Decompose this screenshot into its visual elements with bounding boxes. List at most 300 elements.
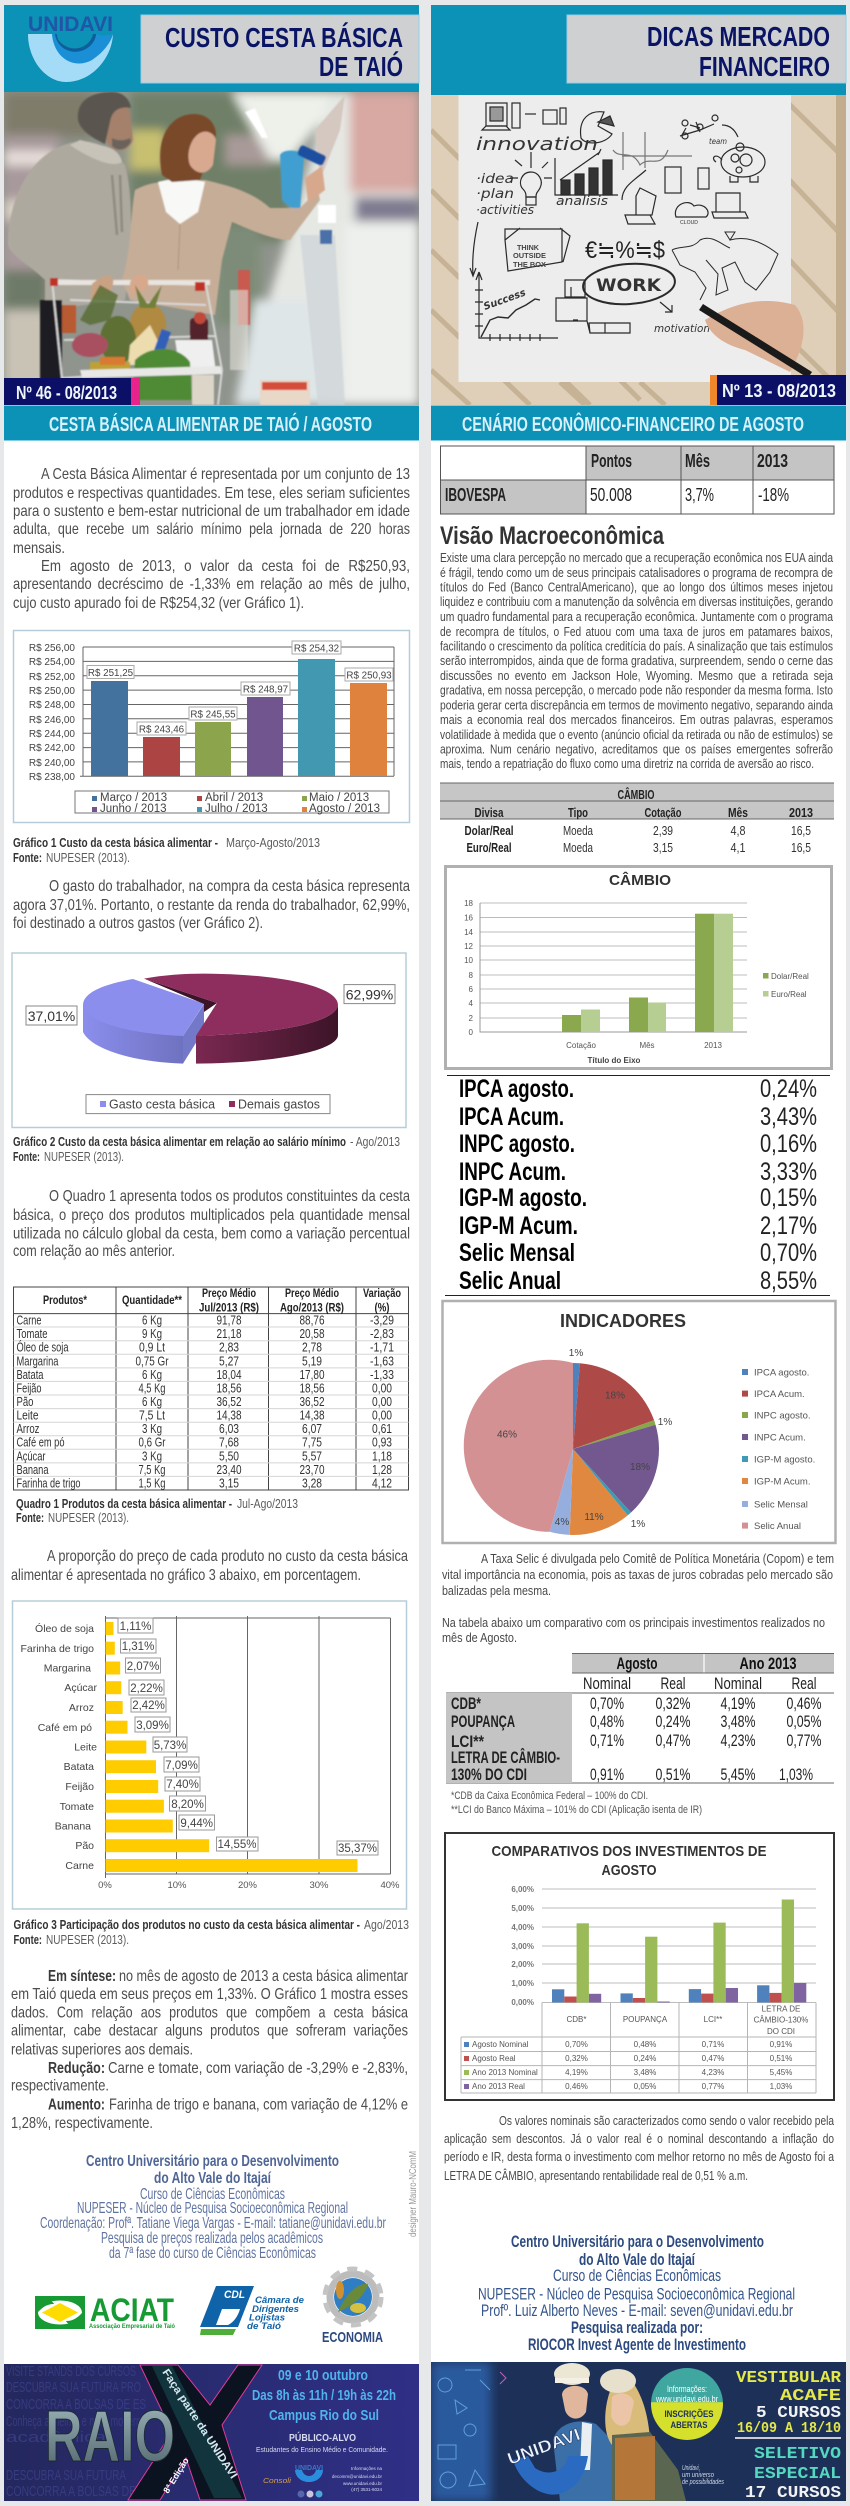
text block: introdução: apresentando decréscimo de -1,33% em relação ao mês de julho,: [13, 576, 410, 593]
text block: proporção: [11, 1548, 408, 1584]
table: quadro 1 produtos: 6,03: [219, 1422, 239, 1436]
big RAIO letters: RAIO: [45, 2397, 175, 2477]
table: comparativo de investimentos: 0,71%: [590, 1731, 624, 1750]
chart: câmbio: Mês: [639, 1041, 655, 1050]
table: ibovespa: 50.008: [590, 485, 632, 505]
event info: [252, 2367, 396, 2424]
logo: UNIDAVI: UNIDAVI: [28, 13, 113, 36]
caption: quadro 1: [16, 1497, 298, 1525]
chart: câmbio: 10: [464, 956, 474, 965]
title: custo cesta básica: CUSTO CESTA BÁSICA: [165, 22, 403, 53]
chart: comparativos dos investimentos: 4,00%: [511, 1923, 534, 1932]
left header band: [4, 5, 419, 92]
table: quadro 1 produtos: 88,76: [300, 1314, 325, 1328]
logo: UNIDAVI: [28, 13, 113, 82]
table: ibovespa: IBOVESPA: [445, 485, 506, 505]
table: quadro 1 produtos: 36,52: [300, 1395, 325, 1409]
logo: ACIAT: Associação Empresarial de Taió: [89, 2324, 175, 2330]
logo: ACIAT: ACIAT: [90, 2292, 174, 2328]
caption: quadro 1: Fonte:: [16, 1511, 44, 1525]
data table legend: 0,71%: [702, 2040, 724, 2049]
table: câmbio: 16,5: [791, 823, 811, 838]
table: quadro 1 produtos: -3,29: [370, 1314, 394, 1328]
banner: Raio X: decomm@unidavi.edu.br: [332, 2474, 383, 2479]
chart: comparativos dos investimentos: LETRA DE: [762, 2004, 800, 2014]
chart: gráfico 3 participação: Banana: [55, 1820, 91, 1832]
image: sketches on paper over wood: OUTSIDE: [513, 251, 546, 260]
text block: taxa selic: mês de Agosto.: [442, 1630, 517, 1645]
text block: introdução: mensais.: [13, 540, 65, 557]
table: indicadores: 0,70%: [760, 1239, 817, 1267]
banner: Raio X: [4, 2363, 419, 2501]
chart: comparativos dos investimentos: DO CDI: [767, 2027, 795, 2036]
legend: câmbio: Euro/Real: [771, 990, 807, 999]
table: ibovespa: Pontos: [591, 451, 632, 471]
legend: meses: Junho / 2013: [100, 803, 167, 815]
background words: [6, 2363, 146, 2500]
banner: vestibular ACAFE: [431, 2362, 846, 2503]
table: câmbio: Moeda: [563, 840, 594, 855]
logo: CDL: Câmara de: [255, 2295, 305, 2306]
text block: em síntese: relativas superiores aos demais.: [11, 2042, 193, 2059]
chart: gráfico 1 custo da cesta: R$ 246,00: [29, 715, 75, 726]
chart: gráfico 3 participação: 35,37%: [338, 1843, 377, 1855]
chart: gráfico 3 participação: 14,55%: [217, 1839, 257, 1851]
course call-outs: SELETIVO: [754, 2445, 841, 2464]
text block: introdução: A Cesta Básica Alimentar é representada por um conjunto de 13: [41, 466, 410, 483]
issue tag: Nº 46: [4, 378, 140, 405]
table: quadro 1 produtos: Quantidade**: [122, 1295, 182, 1307]
chart: comparativos dos investimentos: COMPARATIVOS DOS INVESTIMENTOS DE: [492, 1843, 766, 1860]
table: quadro 1 produtos: 9 Kg: [142, 1327, 162, 1341]
table: quadro 1 produtos: 18,04: [216, 1368, 242, 1382]
table: quadro 1 produtos: 2,83: [219, 1341, 239, 1355]
caption: gráfico 1: Fonte:: [13, 851, 42, 865]
chart: gráfico 3 participação: 30%: [309, 1880, 329, 1891]
table: quadro 1 produtos: -1,33: [370, 1368, 394, 1382]
credits: right column: do Alto Vale do Itajaí: [579, 2250, 696, 2269]
table: câmbio: 4,8: [730, 823, 746, 838]
footnotes: investimentos: **LCI do Banco Máxima – 101% do CDI (Aplicação isenta de IR): [451, 1804, 702, 1816]
table: quadro 1 produtos: 6 Kg: [142, 1368, 162, 1382]
chart: câmbio: 12: [464, 942, 474, 951]
table: quadro 1 produtos: 18,56: [300, 1381, 325, 1395]
info circle: www.unidavi.edu.br: [655, 2394, 718, 2404]
table: comparativo de investimentos: Agosto: [616, 1654, 658, 1673]
table: quadro 1 produtos: 5,27: [219, 1354, 239, 1368]
background words: CONCORRA A BOLSAS DE: [6, 2483, 136, 2500]
table: indicadores: Selic Mensal: [459, 1239, 575, 1267]
credits: left column: Pesquisa de preços realizada pelos acadêmicos: [101, 2230, 323, 2247]
chart: gráfico 3 participação: [12, 1601, 406, 1909]
table: quadro 1 produtos: Feijão: [16, 1381, 42, 1395]
table: indicadores: IPCA agosto.: [459, 1075, 574, 1103]
logo: CDL: [200, 2286, 305, 2335]
issue tag: Nº 46: Nº 46 - 08/2013: [16, 383, 117, 403]
table: quadro 1 produtos: 1,5 Kg: [138, 1476, 166, 1490]
table: quadro 1 produtos: Ago/2013 (R$): [280, 1302, 344, 1314]
text block: valores nominais: LETRA DE CÂMBIO, apresentando rentabilidade real de 0,51 % a.m.: [444, 2168, 748, 2183]
image: sketches on paper over wood: €≒%≒$: [585, 237, 665, 264]
chart: gráfico 1 custo da cesta: R$ 254,32: [294, 644, 339, 654]
chart: gráfico 1 custo da cesta: R$ 244,00: [29, 729, 75, 740]
text block: quadro 1: com relação ao mês anterior.: [13, 1243, 175, 1260]
UNIDAVI U logo: UNIDAVI: [505, 2425, 583, 2469]
credits: left column: da 7ª fase do curso de Ciências Econômicas: [109, 2245, 316, 2262]
table: indicadores: IGP-M agosto.: [459, 1184, 587, 1212]
chart: gráfico 1 custo da cesta: R$ 250,00: [29, 686, 75, 697]
image: sketches on paper over wood: WORK: [596, 276, 662, 296]
table: câmbio: Divisa: [474, 805, 504, 820]
chart: indicadores pizza: 1%: [658, 1417, 672, 1428]
table: quadro 1 produtos: Açúcar: [16, 1449, 46, 1463]
legend: indicadores: INPC Acum.: [754, 1432, 806, 1444]
table: comparativo de investimentos: LETRA DE CÂMBIO-: [451, 1748, 560, 1767]
chart: comparativos dos investimentos: [445, 1833, 834, 2100]
students: [553, 2363, 686, 2501]
course call-outs: 17 CURSOS: [745, 2484, 841, 2503]
table: quadro 1 produtos: 6 Kg: [142, 1314, 162, 1328]
table: indicadores: 0,15%: [760, 1184, 817, 1212]
chart: gráfico 1 custo da cesta: R$ 248,00: [29, 700, 75, 711]
text block: em síntese: Aumento:: [48, 2097, 105, 2114]
chart: gráfico 3 participação: Café em pó: [38, 1722, 92, 1734]
credits: right column: Pesquisa realizada por:: [571, 2318, 703, 2337]
table: comparativo de investimentos: 0,91%: [590, 1765, 624, 1784]
legend: meses: Março / 2013: [100, 792, 167, 804]
table: quadro 1 produtos: 14,38: [300, 1409, 325, 1423]
data table legend: 0,46%: [565, 2082, 588, 2091]
data table legend: Agosto Real: [472, 2054, 516, 2063]
info circle: ABERTAS: [670, 2420, 708, 2431]
chart: indicadores pizza: 11%: [584, 1512, 604, 1523]
banner: Raio X: Informações na: [351, 2466, 382, 2471]
hand with pen: [699, 301, 812, 378]
table: ibovespa: [440, 446, 834, 514]
legend: meses: Abril / 2013: [205, 792, 263, 804]
credits: left column: Coordenação: Profª. Tatiane Viega Vargas - E-mail: tatiane@unidavi.edu.br: [40, 2215, 386, 2232]
table: quadro 1 produtos: 20,58: [300, 1327, 325, 1341]
chart: gráfico 3 participação: Feijão: [65, 1781, 94, 1793]
course call-outs: VESTIBULAR: [736, 2369, 842, 2388]
designer credit vertical: designer Mauro-NComM: [408, 2151, 419, 2237]
data table legend: 4,23%: [702, 2068, 724, 2077]
table: quadro 1 produtos: 23,40: [216, 1463, 242, 1477]
chart: gráfico 3 participação: 10%: [167, 1880, 187, 1891]
data table legend: 0,48%: [634, 2040, 656, 2049]
table: câmbio: [440, 783, 834, 855]
text block: valores nominais: [444, 2113, 835, 2183]
table: quadro 1 produtos: Banana: [16, 1463, 49, 1477]
chart: gráfico 3 participação: 2,22%: [130, 1683, 163, 1695]
legend: gastos: Gasto cesta básica: [109, 1096, 216, 1112]
table: indicadores: 3,43%: [760, 1103, 817, 1131]
chart: gráfico 3 participação: Pão: [75, 1840, 94, 1852]
table: ibovespa: 2013: [757, 451, 788, 471]
legend: gastos: Demais gastos: [238, 1096, 320, 1112]
chart: indicadores pizza: [442, 1301, 836, 1543]
text block: quadro 1: básica, o preço dos produtos multiplicados pela quantidade mensal: [13, 1207, 410, 1224]
image: sketches on paper over wood: ·plan: [476, 187, 514, 202]
chart: gráfico 2 pizza 3D: 62,99%: [346, 986, 393, 1002]
caption: gráfico 3: Ago/2013: [364, 1918, 409, 1932]
data table legend: 0,24%: [634, 2054, 656, 2063]
text block: introdução: Em agosto de 2013, o valor da cesta foi de R$250,93,: [41, 558, 410, 575]
caption: quadro 1: Quadro 1 Produtos da cesta básica alimentar -: [16, 1497, 232, 1511]
table: quadro 1 produtos: Batata: [16, 1368, 44, 1382]
table: comparativo de investimentos: 0,47%: [656, 1731, 690, 1750]
data table legend: 4,19%: [565, 2068, 588, 2077]
text block: em síntese: em Taió queda em seus preços em 1,33%. O Gráfico 1 mostra esses: [11, 1986, 408, 2003]
table: câmbio: Mês: [728, 805, 748, 820]
table: câmbio: Euro/Real: [466, 840, 512, 855]
title: custo cesta básica: [141, 15, 419, 83]
image: sketches on paper over wood: [431, 95, 846, 405]
table: quadro 1 produtos: Tomate: [16, 1327, 48, 1341]
image: sketches on paper over wood: motivation: [654, 322, 710, 335]
table: câmbio: 2,39: [653, 823, 673, 838]
chart: gráfico 3 participação: Batata: [64, 1761, 94, 1773]
data table legend: 3,48%: [634, 2068, 656, 2077]
table: quadro 1 produtos: Carne: [16, 1314, 42, 1328]
chart: gráfico 3 participação: Açúcar: [64, 1682, 97, 1694]
big X: [128, 2365, 262, 2500]
chart: gráfico 3 participação: 20%: [238, 1880, 258, 1891]
table: quadro 1 produtos: 0,00: [372, 1381, 392, 1395]
chart: gráfico 3 participação: Carne: [65, 1860, 94, 1872]
heading: visão macroeconômica: Visão Macroeconômica: [440, 522, 665, 550]
text block: em síntese: Em síntese:: [48, 1968, 116, 1985]
image: sketches on paper over wood: THINK: [517, 243, 540, 252]
table: ibovespa: Mês: [685, 451, 710, 471]
logo: Economia: ECONOMIA: [322, 2329, 383, 2346]
image: sketches on paper over wood: ·idea: [476, 172, 514, 187]
panel: right column dicas mercado financeiro: [431, 5, 846, 2503]
table: comparativo de investimentos: 0,51%: [656, 1765, 690, 1784]
chart: indicadores pizza: INDICADORES: [560, 1311, 686, 1331]
chart: gráfico 3 participação: Leite: [74, 1742, 97, 1754]
table: quadro 1 produtos: [14, 1287, 408, 1490]
chart: gráfico 3 participação: 7,40%: [166, 1779, 199, 1791]
text block: visão macroeconômica: [440, 550, 834, 771]
table: câmbio: Tipo: [568, 805, 588, 820]
legend: indicadores: IPCA agosto.: [754, 1368, 809, 1378]
course call-outs: [735, 2369, 842, 2503]
table: indicadores: Selic Anual: [459, 1267, 561, 1295]
table: quadro 1 produtos: 2,78: [302, 1341, 322, 1355]
logo: CDL: Lojistas: [249, 2312, 285, 2324]
legend: meses: Agosto / 2013: [309, 803, 380, 815]
table: câmbio: Moeda: [563, 823, 594, 838]
chart: comparativos dos investimentos: POUPANÇA: [623, 2015, 668, 2024]
chart: comparativos dos investimentos: 6,00%: [511, 1885, 534, 1894]
chart: comparativos dos investimentos: 1,00%: [511, 1979, 534, 1988]
chart: gráfico 3 participação: 7,09%: [165, 1760, 198, 1772]
table: quadro 1 produtos: 5,50: [219, 1449, 239, 1463]
table: quadro 1 produtos: 1,18: [372, 1449, 392, 1463]
table: quadro 1 produtos: 4,5 Kg: [138, 1381, 166, 1395]
data table legend: 0,51%: [770, 2054, 792, 2063]
table: quadro 1 produtos: (%): [374, 1302, 390, 1314]
table: comparativo de investimentos: 0,77%: [786, 1731, 822, 1750]
chart: gráfico 3 participação: 40%: [380, 1880, 400, 1891]
chart: gráfico 3 participação: 5,73%: [154, 1740, 186, 1752]
credits: left column: [40, 2153, 386, 2262]
chart: gráfico 2 pizza 3D: 37,01%: [28, 1008, 75, 1024]
banner: Raio X: UNIDAVI: [295, 2465, 323, 2472]
chart: câmbio: Título do Eixo: [588, 1056, 641, 1065]
chart: gráfico 3 participação: 2,07%: [127, 1661, 159, 1673]
photo: couple shopping at a supermarket: [4, 92, 419, 405]
info circle: [651, 2368, 723, 2440]
chart: gráfico 3 participação: 2,42%: [132, 1700, 165, 1712]
text block: proporção: A proporção do preço de cada produto no custo da cesta básica: [47, 1548, 408, 1565]
chart: gráfico 3 participação: Tomate: [60, 1801, 94, 1813]
data table legend: Agosto Nominal: [472, 2040, 529, 2049]
legend: câmbio: [763, 972, 809, 999]
chart: gráfico 2 pizza 3D: [12, 953, 406, 1128]
data table legend: 0,91%: [770, 2040, 792, 2049]
chart: gráfico 1 custo da cesta: R$ 243,46: [139, 724, 185, 736]
table: quadro 1 produtos: Leite: [16, 1409, 39, 1423]
right header band: [431, 5, 846, 95]
text block: em síntese: respectivamente.: [11, 2078, 109, 2095]
title: custo cesta básica: DE TAIÓ: [319, 51, 403, 82]
banner: Raio X: 8ª Edição: [161, 2455, 191, 2495]
chart: comparativos dos investimentos: AGOSTO: [602, 1862, 657, 1879]
table: quadro 1 produtos: 0,93: [372, 1436, 392, 1450]
data table legend: 0,05%: [634, 2082, 656, 2091]
chart: gráfico 1 custo da cesta: R$ 256,00: [29, 643, 75, 654]
chart: gráfico 3 participação: 1,11%: [120, 1621, 151, 1633]
table: comparativo de investimentos: 5,45%: [720, 1765, 756, 1784]
event info: 09 e 10 outubro: [278, 2367, 368, 2384]
chart: indicadores pizza: 1%: [631, 1519, 645, 1530]
logo: Economia: [322, 2269, 383, 2346]
table: câmbio: Cotação: [644, 805, 682, 820]
credits: left column: Centro Universitário para o Desenvolvimento: [86, 2153, 339, 2170]
caption: gráfico 2: - Ago/2013: [350, 1135, 400, 1149]
table: quadro 1 produtos: Preço Médio: [285, 1288, 339, 1300]
table: quadro 1 produtos: Variação: [363, 1288, 401, 1300]
issue tag: Nº 13: [710, 375, 846, 405]
caption: gráfico 3: Gráfico 3 Participação dos produtos no custo da cesta básica alimentar -: [14, 1918, 360, 1932]
text block: introdução: [13, 466, 410, 612]
table: indicadores: IGP-M Acum.: [459, 1212, 578, 1240]
table: comparativo de investimentos: [446, 1653, 834, 1784]
data table legend: 0,77%: [702, 2082, 724, 2091]
table: quadro 1 produtos: 3 Kg: [142, 1449, 162, 1463]
chart: gráfico 3 participação: 1,31%: [122, 1641, 154, 1653]
table: quadro 1 produtos: -1,71: [370, 1341, 394, 1355]
table: quadro 1 produtos: 4,12: [372, 1476, 392, 1490]
image: sketches on paper over wood: Success: [482, 287, 527, 313]
table: comparativo de investimentos: Real: [792, 1674, 816, 1693]
table: quadro 1 produtos: 14,38: [216, 1409, 242, 1423]
table: câmbio: 4,1: [730, 840, 746, 855]
background words: acadêmica: [6, 2429, 107, 2446]
table: quadro 1 produtos: 23,70: [300, 1463, 325, 1477]
table: quadro 1 produtos: Óleo de soja: [16, 1340, 69, 1355]
chart: câmbio: 0: [469, 1028, 474, 1037]
image: sketches on paper over wood: THE BOX: [513, 260, 546, 269]
banner: vestibular ACAFE: um universo: [682, 2472, 714, 2479]
text block: em síntese: alimentar, cabe destacar alguns produtos que sofreram variações: [11, 2023, 408, 2040]
table: comparativo de investimentos: Real: [660, 1674, 686, 1693]
table: quadro 1 produtos: 0,6 Gr: [138, 1436, 166, 1450]
chart: gráfico 3 participação: 3,09%: [136, 1720, 169, 1732]
chart: gráfico 3 participação: Óleo de soja: [35, 1622, 94, 1635]
banner: Raio X: (47) 3531-6024: [351, 2487, 382, 2492]
logo: CDL: Dirigentes: [252, 2304, 299, 2315]
text block: introdução: adulta, que recebe um salário mínimo pela jornada de 220 horas: [13, 521, 410, 538]
caption: gráfico 2: Gráfico 2 Custo da cesta básica alimentar em relação ao salário mínimo: [13, 1135, 346, 1149]
caption: gráfico 3: Fonte:: [14, 1933, 42, 1947]
table: quadro 1 produtos: Margarina: [16, 1354, 59, 1368]
table: quadro 1 produtos: 21,18: [216, 1327, 242, 1341]
text block: quadro 1: [13, 1188, 410, 1260]
table: quadro 1 produtos: 7,68: [219, 1436, 239, 1450]
text block: em síntese: no mês de agosto de 2013 a cesta básica alimentar: [119, 1968, 409, 1985]
chart: câmbio: Cotação: [566, 1041, 596, 1050]
table: câmbio: 16,5: [791, 840, 811, 855]
chart: gráfico 3 participação: 0%: [98, 1880, 112, 1891]
table: quadro 1 produtos: Café em pó: [16, 1436, 65, 1450]
logo: CDL: de Taió: [247, 2321, 281, 2332]
image: sketches on paper over wood: analisis: [556, 194, 608, 208]
caption: gráfico 2: NUPESER (2013).: [44, 1150, 124, 1164]
data table legend: 0,47%: [702, 2054, 724, 2063]
table: comparativo de investimentos: 3,48%: [720, 1712, 756, 1731]
chart: comparativos dos investimentos: LCI**: [704, 2015, 722, 2024]
caption: gráfico 2: [13, 1135, 400, 1164]
legend: meses: Maio / 2013: [309, 792, 369, 804]
table: quadro 1 produtos: 7,5 Lt: [139, 1409, 165, 1423]
man: [8, 141, 131, 310]
text block: gasto do trabalhador: [13, 878, 410, 932]
text block: em síntese: 1,28%, respectivamente.: [11, 2115, 153, 2132]
table: quadro 1 produtos: Jul/2013 (R$): [199, 1302, 259, 1314]
chart: gráfico 1 custo da cesta: R$ 251,25: [88, 668, 134, 679]
info circle: INSCRIÇÕES: [664, 2409, 714, 2420]
course call-outs: 5 CURSOS: [756, 2404, 841, 2423]
panel: left column custo cesta básica: [4, 5, 419, 2501]
table: quadro 1 produtos: 6 Kg: [142, 1395, 162, 1409]
legend: indicadores: IPCA Acum.: [754, 1389, 805, 1400]
table: quadro 1 produtos: Preço Médio: [202, 1288, 256, 1300]
credits: right column: [478, 2232, 795, 2354]
table: quadro 1 produtos: 7,5 Kg: [138, 1463, 166, 1477]
table: comparativo de investimentos: 0,24%: [656, 1712, 690, 1731]
data table legend: 5,45%: [770, 2068, 792, 2077]
data table legend: Ano 2013 Real: [472, 2082, 525, 2091]
background words: VISITE STANDS DOS CURSOS: [6, 2363, 136, 2380]
data table legend: [464, 2040, 792, 2091]
table: ibovespa: -18%: [758, 485, 789, 505]
table: comparativo de investimentos: 0,05%: [786, 1712, 822, 1731]
table: câmbio: Dolar/Real: [464, 823, 514, 838]
data table legend: 0,32%: [565, 2054, 588, 2063]
table: quadro 1 produtos: 3,28: [302, 1476, 322, 1490]
table: indicadores: IPCA Acum.: [459, 1103, 564, 1131]
table: indicadores: [445, 1075, 830, 1296]
background words: DESCUBRA SUA FUTURA PRO: [6, 2379, 141, 2396]
chart: câmbio: 16: [464, 914, 474, 922]
table: câmbio: 2013: [789, 805, 813, 820]
table: comparativo de investimentos: 0,70%: [590, 1694, 624, 1713]
event info: Das 8h às 11h / 19h às 22h: [252, 2387, 396, 2404]
credits: right column: Curso de Ciências Econômicas: [553, 2266, 721, 2285]
